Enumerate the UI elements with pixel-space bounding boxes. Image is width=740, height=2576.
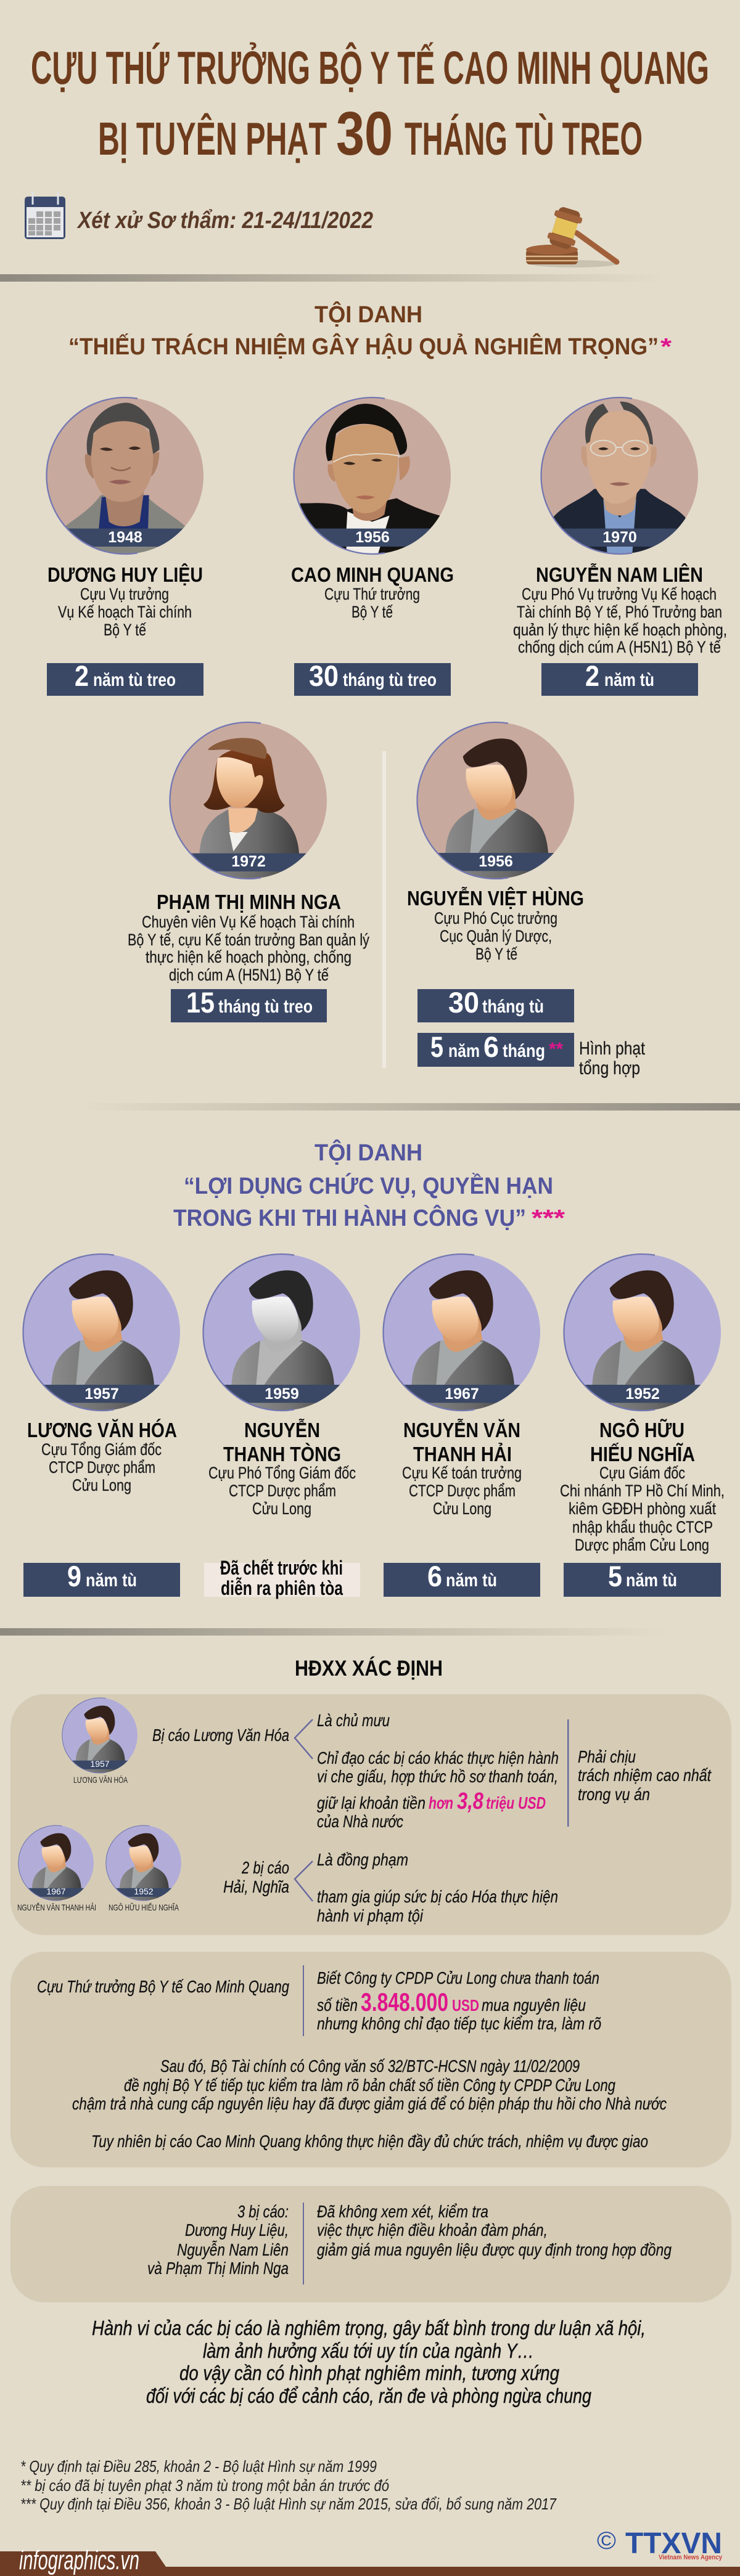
sentence: 6 năm tù: năm tù	[446, 1570, 497, 1591]
sentence: 2 năm tù: năm tù	[604, 670, 654, 690]
profile: Dương Huy Liệu: DƯƠNG HUY LIỆU	[47, 563, 203, 586]
sentence: 5 năm 6 tháng: 5	[430, 1030, 443, 1063]
profile: Nguyễn Việt Hùng: NGUYỄN VIỆT HÙNG	[407, 887, 584, 910]
heading: charge 1: *	[660, 334, 672, 360]
profile: Nguyễn Thanh Tòng: THANH TÒNG	[223, 1443, 341, 1465]
mini portrait: Ngô Hữu Hiếu Nghĩa: NGÔ HỮU HIẾU NGHĨA	[109, 1902, 179, 1912]
profile: Ngô Hữu Hiếu Nghĩa: Cựu Giám đốc	[599, 1464, 685, 1482]
profile: Dương Huy Liệu: Vụ Kế hoạch Tài chính	[58, 603, 192, 621]
profile: Ngô Hữu Hiếu Nghĩa: kiêm GĐĐH phòng xuất	[569, 1499, 716, 1518]
text: ringleader: triệu USD	[486, 1793, 546, 1812]
sentence: 2 năm tù treo: 2	[75, 659, 89, 692]
profile: Nguyễn Thanh Tòng: NGUYỄN	[244, 1419, 320, 1441]
portrait: Nguyễn Thanh Tòng: 1959	[265, 1385, 299, 1403]
profile: Nguyễn Thanh Tòng: Cựu Phó Tổng Giám đốc	[208, 1464, 356, 1482]
portrait: Dương Huy Liệu	[47, 397, 204, 556]
profile: Nguyễn Văn Thanh Hải: Cửu Long	[433, 1499, 491, 1518]
sentence: 2 năm tù	[541, 659, 698, 696]
profile: Ngô Hữu Hiếu Nghĩa: NGÔ HỮU	[599, 1418, 684, 1441]
logo: TTXVN: ©	[597, 2527, 616, 2554]
profile: Dương Huy Liệu: Cựu Vụ trưởng	[80, 585, 169, 603]
heading: charge 2: TỘI DANH	[314, 1138, 422, 1166]
label: Hải, Nghĩa: Hải, Nghĩa	[223, 1877, 289, 1896]
text: accomplices	[317, 1850, 558, 1925]
label: three defendants: và Phạm Thị Minh Nga	[147, 2259, 289, 2278]
mini portrait: Ngô Hữu Hiếu Nghĩa: 1952	[134, 1886, 154, 1896]
profile: Nguyễn Văn Thanh Hải	[402, 1419, 522, 1518]
label: three defendants: Dương Huy Liệu,	[185, 2220, 289, 2240]
sentence: 2 năm tù: 2	[585, 659, 599, 692]
profile: Cao Minh Quang: CAO MINH QUANG	[291, 563, 454, 586]
profile: Phạm Thị Minh Nga: PHẠM THỊ MINH NGA	[157, 891, 341, 913]
portrait: Nguyễn Văn Thanh Hải	[384, 1254, 540, 1414]
heading: charge 2: “LỢI DỤNG CHỨC VỤ, QUYỀN HẠN	[184, 1172, 553, 1199]
label: Cao Minh Quang: Cựu Thứ trưởng Bộ Y tế Cao Minh Quang	[37, 1977, 289, 1996]
profile: Lương Văn Hóa: Cửu Long	[72, 1476, 131, 1494]
portrait: Nguyễn Nam Liên	[541, 397, 698, 556]
sentence: 2 năm tù treo	[47, 659, 204, 696]
profile: Nguyễn Việt Hùng: Cựu Phó Cục trưởng	[434, 909, 557, 927]
sentence: 5 năm tù	[564, 1560, 721, 1597]
text: did not review: giảm giá mua nguyên liệu được quy định trong hợp đồng	[317, 2240, 672, 2259]
text: accomplices: Là đồng phạm	[317, 1850, 408, 1869]
text: knew of unpaid sum: 3.848.000	[361, 1987, 448, 2016]
profile: Lương Văn Hóa: CTCP Dược phẩm	[49, 1458, 155, 1477]
label: Hải, Nghĩa: 2 bị cáo	[241, 1858, 289, 1877]
portrait: Cao Minh Quang: 1956	[355, 529, 390, 546]
note: combined penalty	[579, 1038, 646, 1078]
profile: Cao Minh Quang: Bộ Y tế	[352, 603, 393, 621]
text: ringleader: của Nhà nước	[317, 1812, 403, 1831]
text: ringleader: vi che giấu, hợp thức hồ sơ thanh toán,	[317, 1767, 558, 1786]
label: three defendants: Nguyễn Nam Liên	[177, 2240, 289, 2259]
sentence: 5 năm 6 tháng	[417, 1030, 574, 1067]
footnotes: * Quy định tại Điều 285, khoản 2 - Bộ luật Hình sự năm 1999	[20, 2457, 377, 2476]
profile: Phạm Thị Minh Nga: thực hiện kế hoạch phòng, chống	[146, 948, 352, 966]
portrait: Ngô Hữu Hiếu Nghĩa	[564, 1254, 721, 1414]
profile: Nguyễn Nam Liên	[513, 563, 727, 656]
text: accomplices: tham gia giúp sức bị cáo Hóa thực hiện	[317, 1887, 558, 1906]
text: ringleader: 3,8	[457, 1788, 484, 1814]
sentence: 30 tháng tù treo	[294, 659, 451, 696]
profile: Lương Văn Hóa	[27, 1419, 177, 1494]
sentence: 6 năm tù: 6	[427, 1560, 442, 1592]
icon: calendar	[25, 192, 65, 239]
sentence: 9 năm tù: năm tù	[86, 1570, 137, 1591]
heading: charge 1: “THIẾU TRÁCH NHIỆM GÂY HẬU QUẢ NGHIÊM TRỌNG”	[68, 333, 659, 360]
closing statement: do vậy cần có hình phạt nghiêm minh, tương xứng	[179, 2362, 560, 2384]
vertical divider	[382, 751, 386, 1068]
divider	[0, 1103, 740, 1111]
closing statement: đối với các bị cáo để cảnh cáo, răn đe và phòng ngừa chung	[146, 2384, 592, 2407]
label: Hải, Nghĩa	[223, 1858, 289, 1896]
logo: TTXVN: Vietnam News Agency	[659, 2554, 723, 2561]
sentence: 5 năm 6 tháng: 6	[483, 1030, 499, 1063]
title: 30	[336, 99, 393, 168]
sentence: 2 năm tù treo: năm tù treo	[93, 670, 176, 690]
text: finance ministry letter: Sau đó, Bộ Tài chính có Công văn số 32/BTC-HCSN ngày 11/02/2009	[160, 2056, 580, 2076]
portrait: Nguyễn Thanh Tòng	[204, 1254, 360, 1414]
heading: charge 1	[68, 300, 672, 360]
title: BỊ TUYÊN PHẠT	[98, 113, 327, 165]
heading: HĐXX: HĐXX XÁC ĐỊNH	[295, 1656, 443, 1681]
sentence: 15 tháng tù treo: tháng tù treo	[218, 997, 313, 1017]
sentence: 9 năm tù: 9	[67, 1560, 81, 1592]
text: ringleader: hơn	[429, 1793, 453, 1812]
portrait: Phạm Thị Minh Nga: 1972	[231, 853, 266, 870]
note: combined penalty: Hình phạt	[579, 1038, 646, 1059]
closing statement	[92, 2317, 646, 2407]
text: did not review: Đã không xem xét, kiểm tra	[317, 2202, 488, 2221]
footer bar: infographics.vn	[19, 2545, 139, 2575]
bracket 1	[295, 1719, 313, 1759]
profile: Nguyễn Văn Thanh Hải: Cựu Kế toán trưởng	[402, 1464, 522, 1482]
text: highest responsibility	[578, 1747, 712, 1804]
profile: Phạm Thị Minh Nga	[128, 891, 369, 984]
closing statement: làm ảnh hưởng xấu tới uy tín của ngành Y…	[203, 2339, 534, 2362]
heading: charge 1: TỘI DANH	[314, 300, 422, 328]
sentence: 30 tháng tù treo: 30	[309, 659, 339, 692]
footnotes	[20, 2457, 557, 2513]
sentence: 5 năm tù: 5	[608, 1560, 622, 1592]
text: highest responsibility: trách nhiệm cao nhất	[578, 1766, 712, 1785]
note: died before trial: Đã chết trước khi	[220, 1557, 343, 1579]
profile: Nguyễn Văn Thanh Hải: CTCP Dược phẩm	[409, 1482, 516, 1500]
profile: Nguyễn Văn Thanh Hải: THANH HẢI	[413, 1443, 512, 1465]
text: accomplices: hành vi phạm tội	[317, 1906, 424, 1925]
sentence: 15 tháng tù treo: 15	[186, 986, 215, 1019]
label: Lương Văn Hóa: Bị cáo Lương Văn Hóa	[152, 1726, 289, 1745]
text: knew of unpaid sum: mua nguyên liệu	[482, 1995, 586, 2015]
text: ringleader: Chỉ đạo các bị cáo khác thực hiện hành	[317, 1748, 559, 1767]
profile: Nguyễn Nam Liên: NGUYỄN NAM LIÊN	[536, 563, 703, 586]
footnotes: ** bị cáo đã bị tuyên phạt 3 năm tù trong một bản án trước đó	[20, 2476, 389, 2495]
profile: Ngô Hữu Hiếu Nghĩa: HIẾU NGHĨA	[590, 1443, 695, 1465]
footnotes: *** Quy định tại Điều 356, khoản 3 - Bộ luật Hình sự năm 2015, sửa đổi, bổ sung năm 2017	[20, 2495, 557, 2513]
portrait: Ngô Hữu Hiếu Nghĩa: 1952	[625, 1385, 660, 1403]
portrait: Lương Văn Hóa: 1957	[84, 1385, 119, 1403]
mini portrait: Ngô Hữu Hiếu Nghĩa	[106, 1825, 181, 1912]
mini portrait: Lương Văn Hóa: LƯƠNG VĂN HÓA	[73, 1775, 128, 1785]
profile: Nguyễn Thanh Tòng: CTCP Dược phẩm	[229, 1482, 336, 1500]
portrait: Nguyễn Việt Hùng: 1956	[479, 853, 513, 870]
sentence: 5 năm 6 tháng: **	[549, 1039, 563, 1059]
text: finance ministry letter	[72, 2056, 667, 2113]
text: knew of unpaid sum: số tiền	[317, 1995, 358, 2015]
mini portrait: Lương Văn Hóa	[62, 1698, 138, 1785]
portrait: Nguyễn Nam Liên: 1970	[602, 529, 637, 546]
profile: Nguyễn Thanh Tòng: Cửu Long	[252, 1499, 311, 1518]
profile: Phạm Thị Minh Nga: dịch cúm A (H5N1) Bộ Y tế	[169, 966, 329, 984]
text: did not review	[317, 2202, 672, 2259]
profile: Nguyễn Việt Hùng: Bộ Y tế	[475, 945, 517, 963]
logo: TTXVN: TTXVN	[625, 2527, 722, 2560]
profile: Lương Văn Hóa: Cựu Tổng Giám đốc	[41, 1440, 162, 1459]
mini portrait: Nguyễn Văn Thanh Hải: NGUYỄN VĂN THANH HẢI	[17, 1902, 96, 1912]
mini portrait: Nguyễn Văn Thanh Hải	[17, 1825, 96, 1912]
text: ringleader	[317, 1711, 559, 1831]
text: finance ministry letter: đề nghị Bộ Y tế tiếp tục kiểm tra làm rõ bản chất số tiền Công ty CPDP Cửu Long	[124, 2076, 615, 2095]
profile: Cao Minh Quang: Cựu Thứ trưởng	[324, 585, 420, 603]
sentence: 5 năm 6 tháng: tháng	[503, 1041, 545, 1061]
text: ringleader: Là chủ mưu	[317, 1711, 390, 1730]
sentence: 30 tháng tù	[417, 986, 574, 1022]
sentence: 30 tháng tù: tháng tù	[482, 997, 544, 1017]
footer bar	[0, 2545, 740, 2576]
panel: Cao Minh Quang	[10, 1952, 731, 2167]
profile: Nguyễn Thanh Tòng	[208, 1419, 356, 1518]
profile: Ngô Hữu Hiếu Nghĩa	[560, 1418, 725, 1554]
profile: Ngô Hữu Hiếu Nghĩa: Dược phẩm Cửu Long	[575, 1536, 709, 1554]
sentence: 5 năm tù: năm tù	[626, 1570, 677, 1591]
profile: Phạm Thị Minh Nga: Bộ Y tế, cựu Kế toán trưởng Ban quản lý	[128, 931, 369, 949]
note: combined penalty: tổng hợp	[579, 1058, 640, 1078]
sentence: 30 tháng tù: 30	[448, 986, 479, 1019]
portrait: Cao Minh Quang	[294, 397, 451, 556]
panel: main defendants	[10, 1694, 731, 1935]
panel: three defendants	[10, 2186, 731, 2302]
profile: Lương Văn Hóa: LƯƠNG VĂN HÓA	[27, 1419, 177, 1441]
date text: Xét xử Sơ thẩm: 21-24/11/2022	[76, 208, 373, 234]
portrait: Lương Văn Hóa	[23, 1254, 180, 1414]
text: highest responsibility: Phải chịu	[578, 1747, 636, 1766]
divider	[0, 1628, 740, 1636]
profile: Cao Minh Quang	[291, 563, 454, 621]
label: three defendants: 3 bị cáo:	[237, 2202, 289, 2221]
profile: Nguyễn Văn Thanh Hải: NGUYỄN VĂN	[403, 1419, 520, 1441]
text: knew of unpaid sum	[317, 1968, 601, 2033]
text: knew of unpaid sum: USD	[452, 1996, 479, 2015]
text: highest responsibility: trong vụ án	[578, 1785, 650, 1804]
profile: Dương Huy Liệu: Bộ Y tế	[104, 621, 146, 639]
profile: Phạm Thị Minh Nga: Chuyên viên Vụ Kế hoạch Tài chính	[142, 913, 355, 931]
portrait: Nguyễn Việt Hùng	[417, 722, 574, 882]
profile: Nguyễn Việt Hùng: Cục Quản lý Dược,	[440, 927, 552, 945]
heading: charge 2: TRONG KHI THI HÀNH CÔNG VỤ”	[173, 1204, 526, 1231]
sentence: 6 năm tù	[384, 1560, 540, 1597]
heading: charge 2: ***	[532, 1205, 565, 1231]
sentence: 5 năm 6 tháng: năm	[448, 1041, 480, 1061]
sentence: 30 tháng tù treo: tháng tù treo	[343, 670, 437, 690]
mini portrait: Nguyễn Văn Thanh Hải: 1967	[46, 1886, 66, 1896]
profile: Nguyễn Việt Hùng	[407, 887, 584, 963]
profile: Dương Huy Liệu	[47, 563, 203, 639]
text: ringleader: giữ lại khoản tiền	[317, 1793, 426, 1812]
icon: gavel	[526, 205, 618, 267]
sentence: 15 tháng tù treo	[171, 986, 327, 1022]
portrait: Phạm Thị Minh Nga	[170, 722, 327, 880]
mini portrait: Lương Văn Hóa: 1957	[90, 1759, 110, 1769]
title	[31, 42, 709, 168]
divider	[0, 274, 740, 282]
text: knew of unpaid sum: Biết Công ty CPDP Cửu Long chưa thanh toán	[317, 1968, 599, 1987]
closing statement: Hành vi của các bị cáo là nghiêm trọng, gây bất bình trong dư luận xã hội,	[92, 2317, 646, 2339]
note: died before trial	[204, 1557, 360, 1599]
portrait: Nguyễn Văn Thanh Hải: 1967	[445, 1385, 479, 1403]
note: died before trial: diễn ra phiên tòa	[221, 1577, 343, 1599]
label: three defendants	[147, 2202, 289, 2278]
sentence: 9 năm tù	[23, 1560, 180, 1597]
bracket 2	[295, 1861, 313, 1901]
text: knew of unpaid sum: nhưng không chỉ đạo tiếp tục kiểm tra, làm rõ	[317, 2014, 601, 2033]
text: did not review: việc thực hiện điều khoản đàm phán,	[317, 2220, 548, 2240]
portrait: Dương Huy Liệu: 1948	[108, 529, 142, 546]
heading: charge 2	[173, 1138, 565, 1231]
